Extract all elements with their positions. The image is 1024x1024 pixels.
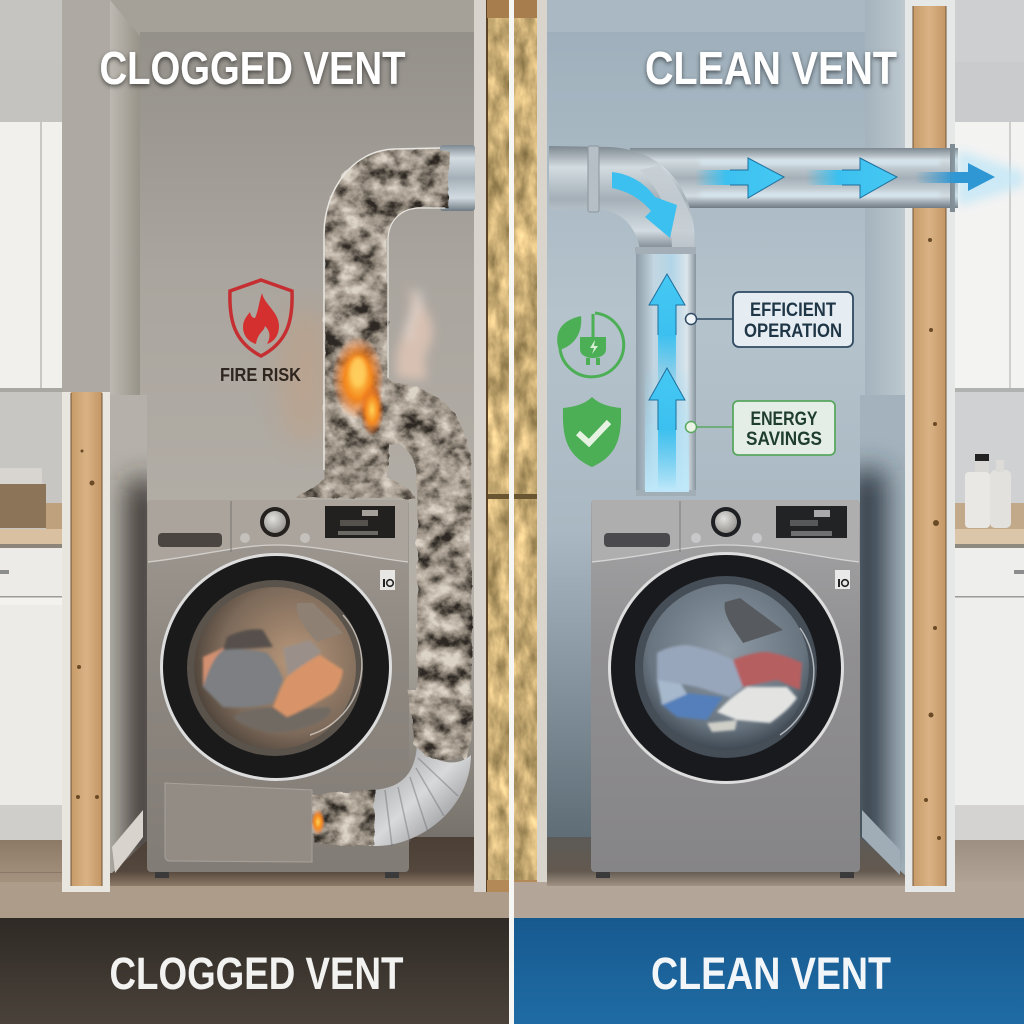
lint filter in drum [725,598,783,643]
vertical duct run [636,250,696,495]
back wall [110,0,476,880]
laundry room background right [955,0,1024,918]
arrow up 1 [649,274,685,395]
fire glow [332,336,384,436]
arrow up 2 [649,368,685,490]
detergent drawer [158,533,222,547]
exhaust mist [958,150,1024,206]
panel: clogged vent side [0,0,547,1024]
door ring [608,552,844,784]
callout: efficient operation: EFFICIENT [750,300,836,321]
heading bottom: clogged vent: CLOGGED VENT [110,948,404,999]
duct flange [950,144,955,212]
bottom band: clean [514,918,1024,1024]
lint filter in drum [297,603,343,642]
callout: energy savings: SAVINGS [746,429,822,450]
panel: clean vent side [514,0,1024,1024]
arrow horizontal 2 [806,158,897,198]
lint pile on dryer [296,471,416,498]
badge [380,570,395,590]
airflow arrows [612,158,995,490]
display panel [776,506,847,538]
arrow horizontal 1 [695,158,784,198]
door ring [160,553,392,781]
arrow exit [915,163,995,191]
dryer: clogged side [147,500,409,878]
callout: energy savings: ENERGY [750,409,818,430]
clogged dryer duct full of lint [296,145,475,760]
badge [835,570,850,589]
bottles [965,454,1011,528]
label: fire risk: FIRE RISK [220,365,301,385]
center divider [509,0,514,1024]
right wall edge with insulation [474,0,547,892]
right wall cross-section with wood stud [905,0,955,892]
duct outline highlight [324,148,440,470]
icon: green check shield [563,397,621,467]
dryer: clean side [591,500,860,878]
callout: energy savings [686,401,835,455]
clean metal duct [549,144,1024,496]
clothes [203,629,343,733]
arrow curved [612,172,677,238]
airflow glow [645,370,689,492]
heading bottom: clean vent: CLEAN VENT [651,948,891,999]
icon: eco energy plug [557,313,624,377]
icon: fire risk shield [230,280,292,356]
callout: efficient operation [686,292,853,347]
laundry room background left [0,0,64,918]
control knob [691,507,762,543]
control knob [240,507,310,543]
lint mass [324,149,471,760]
airflow streaks on horizontal duct [700,160,940,197]
floor right [514,836,1024,918]
horizontal duct run [630,148,958,208]
clothes [657,645,802,732]
elbow [549,146,695,252]
smoke [396,285,433,380]
detergent drawer [604,533,670,547]
display panel [325,506,395,538]
heading top: clean vent: CLEAN VENT [645,42,897,94]
left wall cross-section with wood stud [62,0,110,892]
back wall [547,0,905,875]
callout: efficient operation: OPERATION [744,321,842,342]
flexible duct and lint over dryer [311,690,472,846]
duct metal stub at wall [440,145,475,211]
heading top: clogged vent: CLOGGED VENT [100,42,406,94]
lower access panel [165,783,312,862]
floor left [0,836,510,918]
bottom band: clogged [0,918,509,1024]
